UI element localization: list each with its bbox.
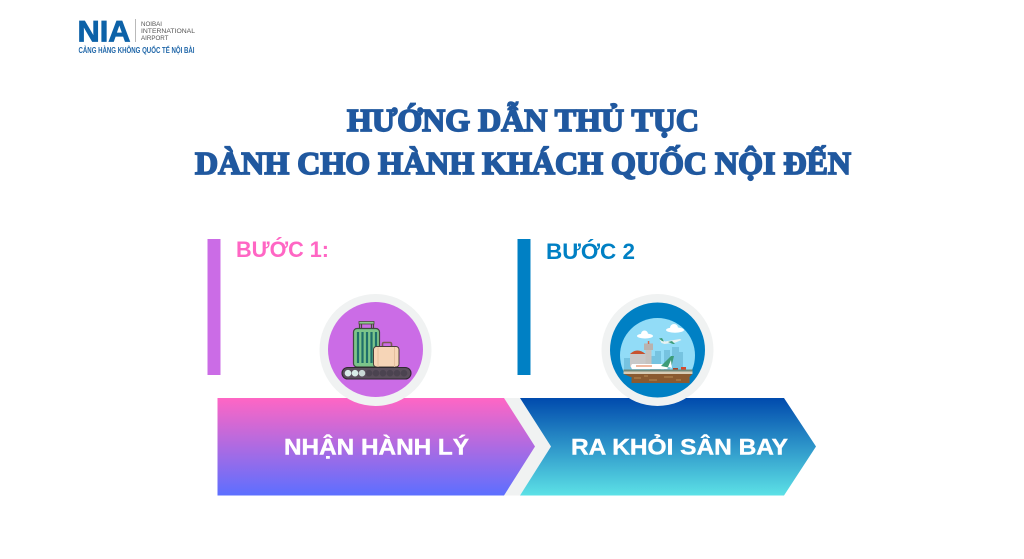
logo: NIA: NIA <box>78 16 130 48</box>
icon: airport scene <box>602 294 714 406</box>
control tower and terminal <box>630 341 653 367</box>
logo: NIA: CẢNG HÀNG KHÔNG QUỐC TẾ NỘI BÀI <box>78 44 194 55</box>
arrow: ra khỏi sân bay <box>520 398 816 496</box>
step 1 label: BƯỚC 1: <box>236 237 329 262</box>
icon: baggage on conveyor <box>320 294 432 406</box>
ground vehicles <box>673 367 686 371</box>
clouds <box>637 324 684 338</box>
step 2 marker bar <box>518 239 530 375</box>
flying plane <box>659 338 682 344</box>
small beige suitcase <box>374 342 399 367</box>
title: DÀNH CHO HÀNH KHÁCH QUỐC NỘI ĐẾN <box>195 145 851 181</box>
title <box>195 102 851 181</box>
logo: NIA: NOIBAI <box>141 21 162 28</box>
ground island <box>624 370 692 383</box>
step 1 marker bar <box>208 239 220 375</box>
large green suitcase <box>354 322 380 370</box>
arrow: ra khỏi sân bay: RA KHỎI SÂN BAY <box>571 434 788 460</box>
logo: NIA: AIRPORT <box>141 35 169 42</box>
conveyor belt <box>342 368 411 379</box>
arrow: nhận hành lý: NHẬN HÀNH LÝ <box>284 434 469 460</box>
arrow: nhận hành lý <box>218 398 535 496</box>
parked plane <box>631 356 674 369</box>
logo: NIA: INTERNATIONAL <box>141 28 196 35</box>
title: HƯỚNG DẪN THỦ TỤC <box>347 102 699 138</box>
step 2 label: BƯỚC 2 <box>546 239 635 264</box>
arrow separator band <box>490 398 553 496</box>
logo: NIA <box>78 16 196 55</box>
